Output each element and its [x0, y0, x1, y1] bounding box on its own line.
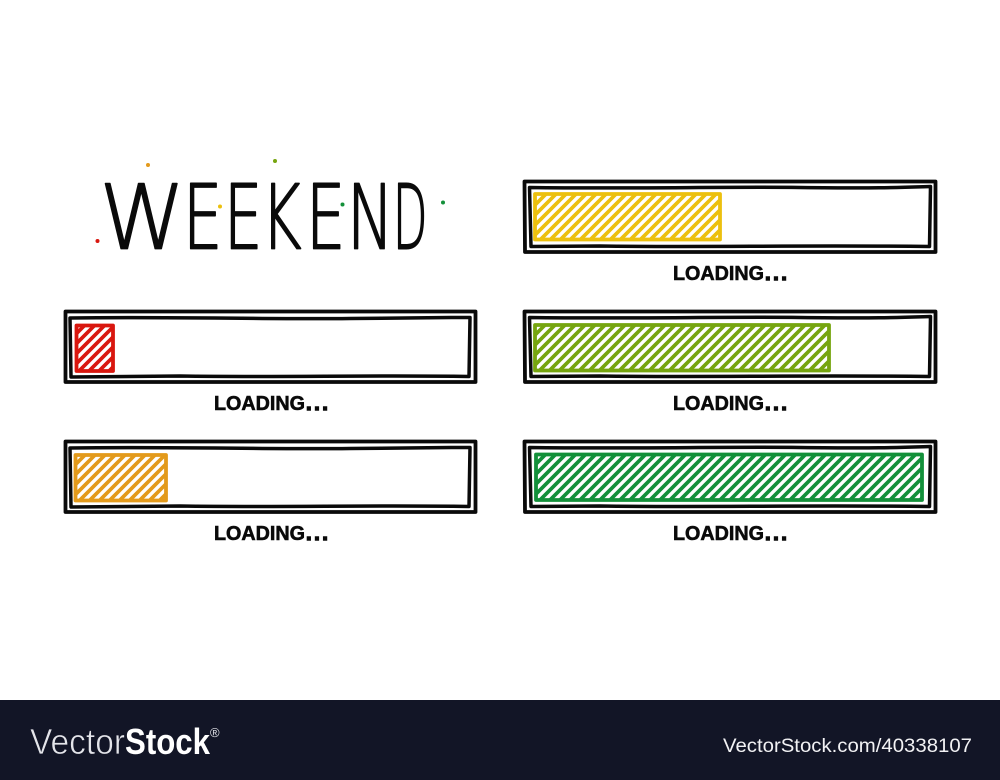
label: ...: [306, 522, 328, 545]
title: WEEKEND: E: [183, 167, 222, 271]
title: WEEKEND: W: [100, 165, 185, 270]
fill: yellow 45%: [535, 194, 720, 240]
progress bar: red: [66, 312, 476, 415]
label: ...: [306, 392, 328, 415]
registered mark: ®: [210, 725, 220, 740]
label: LOADING: [673, 392, 764, 415]
progress bar: olive: [524, 312, 936, 415]
fill: green 100%: [536, 454, 922, 500]
label: ...: [765, 392, 787, 415]
title: WEEKEND: [100, 165, 427, 271]
footer band: [0, 700, 1000, 780]
label: LOADING: [673, 522, 764, 545]
label: ...: [765, 262, 787, 285]
progress bar: green: [524, 442, 936, 545]
title: WEEKEND: K: [261, 167, 301, 271]
label: LOADING: [214, 392, 305, 415]
fill: olive 72%: [535, 325, 829, 370]
title: WEEKEND: D: [393, 166, 427, 270]
label: LOADING: [214, 522, 305, 545]
title: WEEKEND: E: [306, 167, 345, 271]
label: ...: [765, 522, 787, 545]
footer image id: VectorStock.com/40338107: [723, 736, 972, 757]
decorative coloured dots: [96, 159, 445, 243]
fill: red 10%: [76, 326, 113, 371]
title: WEEKEND: E: [224, 165, 262, 270]
progress bar: orange: [66, 442, 476, 545]
footer logo: Vector: [30, 721, 125, 762]
footer logo: Stock: [125, 721, 211, 762]
fill: orange 23%: [76, 455, 166, 500]
progress bar: yellow: [524, 182, 936, 285]
label: LOADING: [673, 262, 764, 285]
title: WEEKEND: N: [347, 166, 394, 271]
